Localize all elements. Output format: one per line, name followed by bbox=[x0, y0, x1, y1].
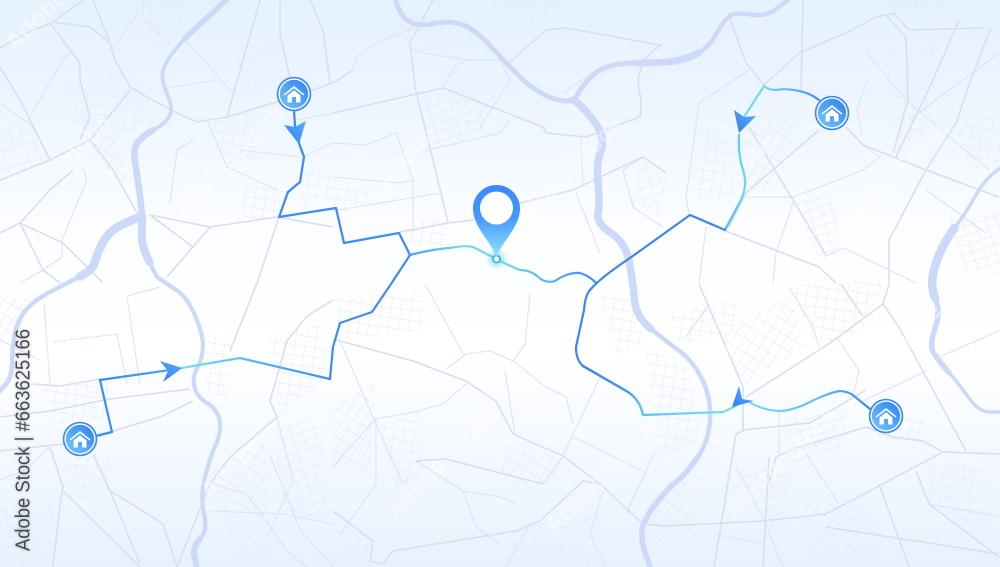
arrow: left route bbox=[160, 361, 182, 382]
icon: home left bbox=[63, 422, 97, 456]
icon: home top right bbox=[815, 96, 849, 130]
stock watermarks: Adobe Stock bbox=[830, 116, 953, 239]
stock watermarks: Adobe Stock bbox=[380, 401, 503, 524]
river: centre bbox=[573, 100, 710, 567]
stock watermarks: Stock bbox=[270, 218, 336, 284]
stock watermarks: Adobe Stock bbox=[540, 416, 663, 539]
stock watermarks: Adobe Stock bbox=[167, 99, 290, 222]
stock watermarks: Adobe Stock bbox=[720, 401, 843, 524]
icon: home top bbox=[277, 77, 311, 111]
river: left bbox=[134, 0, 228, 567]
river: top bbox=[395, 0, 575, 101]
stock watermarks: Adobe bbox=[195, 432, 267, 504]
stock watermarks: Adobe bbox=[710, 127, 782, 199]
stock watermarks: Adobe Stock bbox=[505, 111, 628, 234]
route: top-right house to lower road bbox=[576, 86, 819, 415]
stock watermarks: Adobe bbox=[45, 110, 117, 182]
route: left house to junction bbox=[96, 255, 410, 436]
route: lower-right house bbox=[749, 391, 870, 411]
route: junction through pin bbox=[410, 246, 597, 284]
icon: destination pin bbox=[473, 185, 520, 270]
arrow: lower-right route bbox=[732, 386, 754, 407]
stock watermarks: Adobe bbox=[370, 122, 442, 194]
river: right bbox=[932, 167, 1000, 412]
arrow: top route bbox=[284, 121, 306, 144]
stock id caption: Adobe Stock | #663625166 bbox=[12, 329, 34, 551]
stock watermarks: Adobe Stock bbox=[25, 256, 148, 379]
stock watermarks: Adobe bbox=[875, 297, 947, 369]
route: top house to junction bbox=[279, 110, 410, 255]
river: left branch bbox=[0, 216, 142, 395]
arrow: top-right route bbox=[734, 110, 756, 133]
river: top right bbox=[575, 0, 790, 100]
stock watermarks: Stock bbox=[720, 298, 786, 364]
icon: home lower right bbox=[869, 399, 903, 433]
